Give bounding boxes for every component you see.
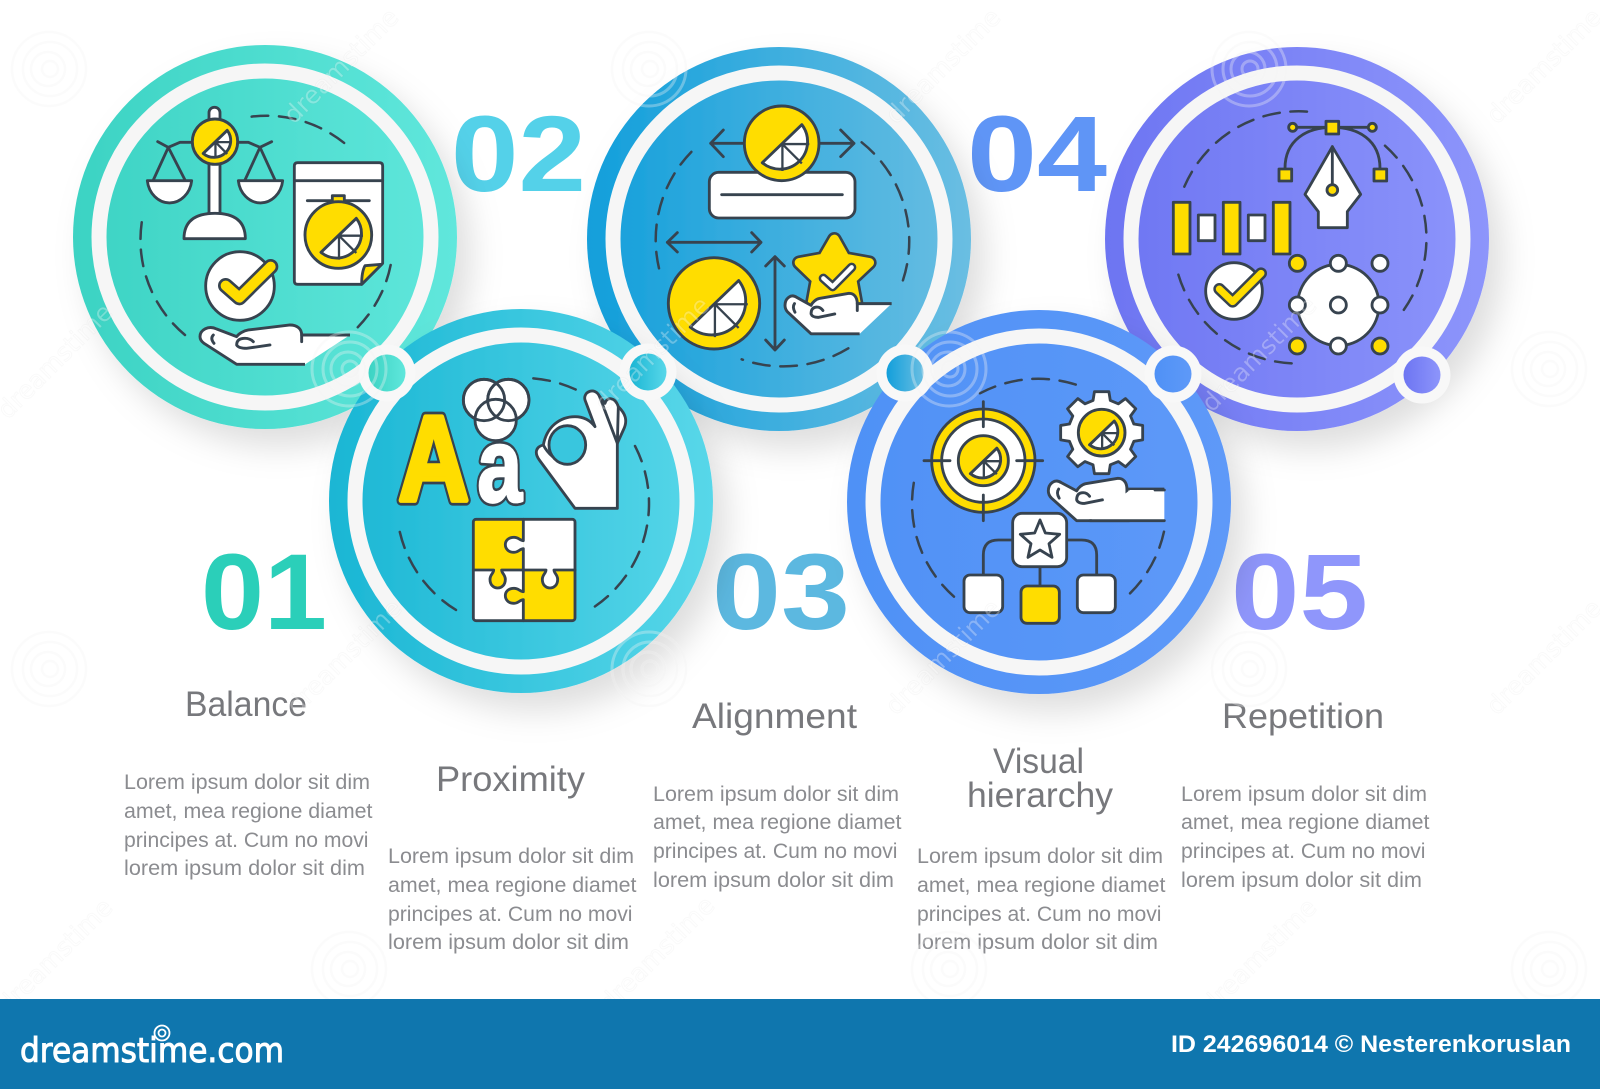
text block: Visual hierarchy: amet, mea regione diamet (917, 873, 1166, 897)
text block: Visual hierarchy: lorem ipsum dolor sit dim (917, 930, 1158, 954)
footer credit: ID 242696014 © Nesterenkoruslan (1171, 1031, 1571, 1058)
icon group: balance (140, 107, 391, 364)
icon group: repetition (1173, 111, 1426, 363)
text block: Repetition (1181, 782, 1430, 892)
watermark overlay: dreamstime (589, 291, 715, 417)
text block: Repetition: Lorem ipsum dolor sit dim (1181, 782, 1427, 806)
number 01: 01 (201, 531, 327, 652)
number 03: 03 (712, 531, 850, 652)
watermark overlay: dreamstime (594, 891, 720, 1017)
heading: Repetition: Repetition (1222, 697, 1384, 736)
text block: Repetition: amet, mea regione diamet (1181, 810, 1430, 834)
text block: Proximity: Lorem ipsum dolor sit dim (388, 844, 634, 868)
text block: Proximity: principes at. Cum no movi (388, 902, 632, 926)
watermark overlay: dreamstime (1196, 893, 1322, 1019)
heading: Balance: Balance (185, 685, 307, 724)
connector dot 1 (358, 344, 416, 402)
text block: Visual hierarchy (917, 844, 1166, 954)
watermark overlay: dreamstime (281, 594, 407, 720)
heading: Visual hierarchy: hierarchy (967, 776, 1114, 815)
text block: Alignment: lorem ipsum dolor sit dim (653, 868, 894, 892)
watermark overlay: dreamstime (278, 3, 404, 129)
watermark overlay: dreamstime (1196, 291, 1322, 417)
icon group: visual hierarchy (912, 379, 1164, 623)
text block: Alignment: amet, mea regione diamet (653, 810, 902, 834)
connector dot 3 (876, 344, 934, 402)
text block: Repetition: principes at. Cum no movi (1181, 839, 1426, 863)
heading: Proximity: Proximity (436, 760, 586, 799)
text block: Proximity: amet, mea regione diamet (388, 873, 637, 897)
connector dot 2 (620, 344, 676, 400)
number 05: 05 (1231, 531, 1368, 652)
panel: visual hierarchy circle (847, 310, 1231, 694)
connector dot 4 (1144, 346, 1202, 402)
letter a: a (477, 408, 523, 525)
text block: Alignment (653, 782, 902, 892)
number 02: 02 (451, 93, 586, 214)
text block: Visual hierarchy: Lorem ipsum dolor sit dim (917, 844, 1163, 868)
icon group: alignment (656, 106, 909, 366)
text block: Visual hierarchy: principes at. Cum no movi (917, 902, 1162, 926)
panel: balance circle (73, 45, 457, 429)
text block: Balance: Lorem ipsum dolor sit dim (124, 770, 370, 794)
connector dot 5 (1394, 346, 1450, 404)
text block: Alignment: principes at. Cum no movi (653, 839, 898, 863)
icon: logo spiral (154, 1026, 170, 1040)
text block: Proximity: lorem ipsum dolor sit dim (388, 930, 629, 954)
text block: Balance: principes at. Cum no movi (124, 828, 368, 852)
letter A: A (398, 391, 469, 526)
text block: Alignment: Lorem ipsum dolor sit dim (653, 782, 899, 806)
heading: Alignment: Alignment (692, 697, 857, 736)
text block: Proximity (388, 844, 637, 954)
icon group: proximity (398, 378, 649, 621)
heading: Visual hierarchy: Visual (993, 742, 1084, 781)
heading: Visual hierarchy (967, 742, 1114, 815)
footer logo text: dreamstime.com (20, 1031, 284, 1071)
watermark overlay: dreamstime (880, 594, 1006, 720)
watermark overlay: dreamstime (880, 3, 1006, 129)
text block: Repetition: lorem ipsum dolor sit dim (1181, 868, 1422, 892)
number 04: 04 (967, 93, 1107, 214)
footer bar (0, 999, 1600, 1089)
panel: alignment circle (587, 47, 971, 431)
text block: Balance: amet, mea regione diamet (124, 799, 373, 823)
panel: repetition circle (1105, 47, 1489, 431)
letter a: a (477, 408, 523, 525)
text block: Balance (124, 770, 373, 880)
panel: proximity circle (329, 309, 713, 693)
text block: Balance: lorem ipsum dolor sit dim (124, 856, 365, 880)
letter A: A (398, 391, 469, 526)
